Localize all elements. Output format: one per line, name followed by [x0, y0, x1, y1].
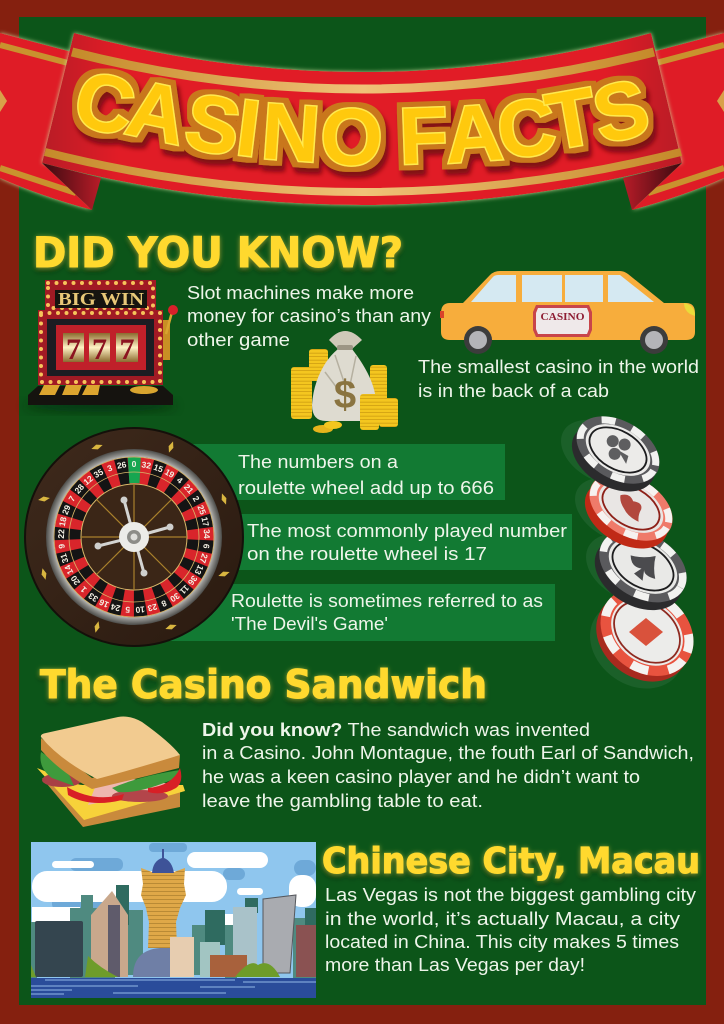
text: macau fact: located in China. This city makes 5 times	[325, 931, 679, 952]
ribbon fold left	[42, 163, 101, 210]
maroon building right	[296, 925, 316, 977]
wheel numbers: 33	[86, 591, 100, 604]
wheel numbers: 20	[68, 573, 82, 587]
grey curved tower	[263, 895, 296, 973]
heading: did you know: DID YOU KNOW?	[33, 228, 403, 277]
text: sandwich fact: Did you know? The sandwich was invented	[202, 719, 590, 740]
wheel numbers: 7	[66, 494, 77, 503]
wheel numbers: 35	[92, 466, 105, 480]
heading: the casino sandwich: The Casino Sandwich	[40, 663, 487, 708]
dark teal buildings	[116, 885, 316, 945]
illustration: macau skyline	[31, 842, 316, 998]
text: slot machines	[187, 282, 432, 350]
green hills	[31, 956, 280, 977]
text: sandwich fact	[202, 719, 694, 811]
icon: sandwich	[37, 717, 185, 827]
striped tower	[91, 891, 128, 977]
sky	[31, 842, 316, 998]
glass tower	[233, 907, 257, 969]
wheel numbers	[56, 459, 212, 615]
wheel numbers: 1	[78, 584, 89, 595]
icon: slot machine: 7	[92, 333, 107, 366]
text: roulette fact 1: roulette wheel add up to 666	[238, 477, 494, 498]
wheel numbers: 2	[191, 494, 202, 504]
small tan building	[170, 937, 194, 977]
text: roulette fact 3	[231, 590, 543, 634]
icon: slot machine: 7	[120, 333, 134, 366]
ribbon fold right	[623, 163, 682, 210]
wheel numbers: 27	[198, 552, 210, 565]
wheel numbers: 32	[141, 459, 152, 471]
icon: slot machine: BIG WIN	[58, 289, 144, 309]
text: slot machines: money for casino’s than any	[187, 305, 432, 326]
water	[31, 978, 316, 998]
wheel numbers: 24	[110, 602, 121, 614]
wheel numbers: 9	[56, 543, 67, 549]
gold spokes	[81, 484, 187, 590]
text: roulette fact 3: 'The Devil's Game'	[231, 613, 388, 634]
text: roulette fact 2: The most commonly played number	[247, 520, 567, 541]
text: macau fact	[325, 884, 697, 975]
wheel numbers: 16	[97, 597, 110, 610]
wheel numbers: 11	[178, 583, 191, 597]
text: smallest casino: is in the back of a cab	[418, 380, 609, 401]
low teal building	[200, 942, 220, 977]
wheel wood rim	[25, 428, 243, 646]
silver cross handle	[98, 500, 170, 573]
green fact box 1	[175, 444, 505, 500]
icon: casino limo	[440, 271, 695, 354]
icon: roulette wheel	[25, 428, 243, 646]
title text: CASINO FACTS	[66, 53, 657, 182]
wheel numbers: 34	[202, 529, 212, 539]
wheel center	[81, 484, 187, 590]
icon: poker chip stack	[550, 402, 711, 706]
wheel numbers: 6	[201, 543, 212, 550]
wheel numbers: 8	[160, 598, 168, 609]
wheel numbers: 31	[58, 552, 70, 564]
ribbon back left	[0, 33, 92, 210]
wheel numbers: 28	[72, 482, 86, 496]
salami	[112, 790, 168, 802]
ribbon back right	[632, 33, 724, 210]
top bread face	[41, 717, 180, 779]
text: smallest casino: The smallest casino in the world	[418, 356, 699, 377]
text: smallest casino	[418, 356, 699, 401]
lettuce	[40, 752, 180, 792]
ribbon top gold band	[72, 52, 654, 89]
club chip	[560, 402, 671, 505]
brown low building	[210, 955, 247, 977]
casino sign on limo	[533, 305, 592, 337]
icon: money bag with coins	[291, 331, 398, 433]
title banner	[0, 33, 724, 210]
wheel numbers: 29	[60, 503, 73, 516]
text: macau fact: Las Vegas is not the biggest gambling city	[325, 884, 697, 905]
pocket track	[75, 478, 193, 596]
diamonds on rim	[38, 441, 230, 633]
ribbon main	[42, 33, 682, 205]
text: roulette fact 2: on the roulette wheel is 17	[247, 543, 487, 564]
cheese	[37, 768, 185, 820]
text: sandwich fact: leave the gambling table to eat.	[202, 790, 483, 811]
text: roulette fact 2	[247, 520, 567, 564]
icon: slot machine	[24, 280, 178, 412]
clouds	[32, 852, 316, 933]
bottom bread	[42, 778, 180, 827]
pocket zero	[128, 457, 141, 483]
darker clouds	[52, 843, 316, 910]
silver ring	[46, 449, 222, 625]
wheel numbers: 3	[106, 463, 114, 474]
tower dome	[152, 849, 174, 873]
icon: money bag with coins: $	[334, 373, 356, 417]
text: roulette fact 1	[238, 451, 494, 498]
wheel numbers: 18	[57, 516, 69, 527]
text: sandwich fact: he was a keen casino player and he didn’t want to	[202, 766, 640, 787]
wheel numbers: 13	[192, 563, 206, 577]
dark building left	[35, 921, 83, 977]
chip shadows	[550, 407, 701, 706]
wheel numbers: 4	[175, 475, 185, 486]
wheel numbers: 36	[186, 574, 200, 587]
tomato	[67, 768, 181, 803]
spade chip	[582, 515, 700, 625]
top bread crust	[41, 738, 180, 789]
diamond chip	[579, 570, 711, 700]
wheel numbers: 22	[56, 529, 66, 539]
green fact box 3	[170, 584, 555, 641]
text: sandwich fact: in a Casino. John Montague, the fouth Earl of Sandwich,	[202, 742, 694, 763]
wheel numbers: 5	[125, 605, 131, 615]
wheel numbers: 23	[146, 602, 158, 614]
wheel numbers: 14	[62, 563, 75, 576]
wheel numbers: 0	[132, 459, 137, 469]
heart chip	[573, 459, 684, 562]
icon: slot machine: 7	[66, 333, 81, 366]
ham	[88, 775, 180, 805]
wheel numbers: 30	[168, 591, 182, 604]
text: macau fact: more than Las Vegas per day!	[325, 954, 585, 975]
text: roulette fact 3: Roulette is sometimes referred to as	[231, 590, 543, 611]
wheel numbers: 17	[199, 516, 211, 528]
text: macau fact: in the world, it’s actually Macau, a city	[325, 908, 681, 929]
text: slot machines: other game	[187, 329, 290, 350]
number track	[62, 464, 206, 610]
wheel numbers: 25	[195, 504, 208, 516]
far buildings	[31, 895, 316, 985]
gold lotus tower	[141, 868, 186, 948]
text: roulette fact 1: The numbers on a	[238, 451, 399, 472]
wheel numbers: 19	[163, 467, 176, 480]
heading: chinese city macau: Chinese City, Macau	[322, 841, 700, 882]
wheel numbers: 10	[135, 604, 145, 615]
text: slot machines: Slot machines make more	[187, 282, 414, 303]
green fact box 2	[225, 514, 572, 570]
wheel numbers: 12	[81, 473, 95, 487]
wheel numbers: 21	[182, 482, 196, 496]
wheel numbers: 26	[116, 459, 127, 471]
glass dome	[133, 948, 170, 977]
ribbon bottom gold band	[45, 152, 681, 192]
wheel numbers: 15	[152, 462, 165, 475]
casino sign on limo: CASINO	[540, 311, 585, 323]
